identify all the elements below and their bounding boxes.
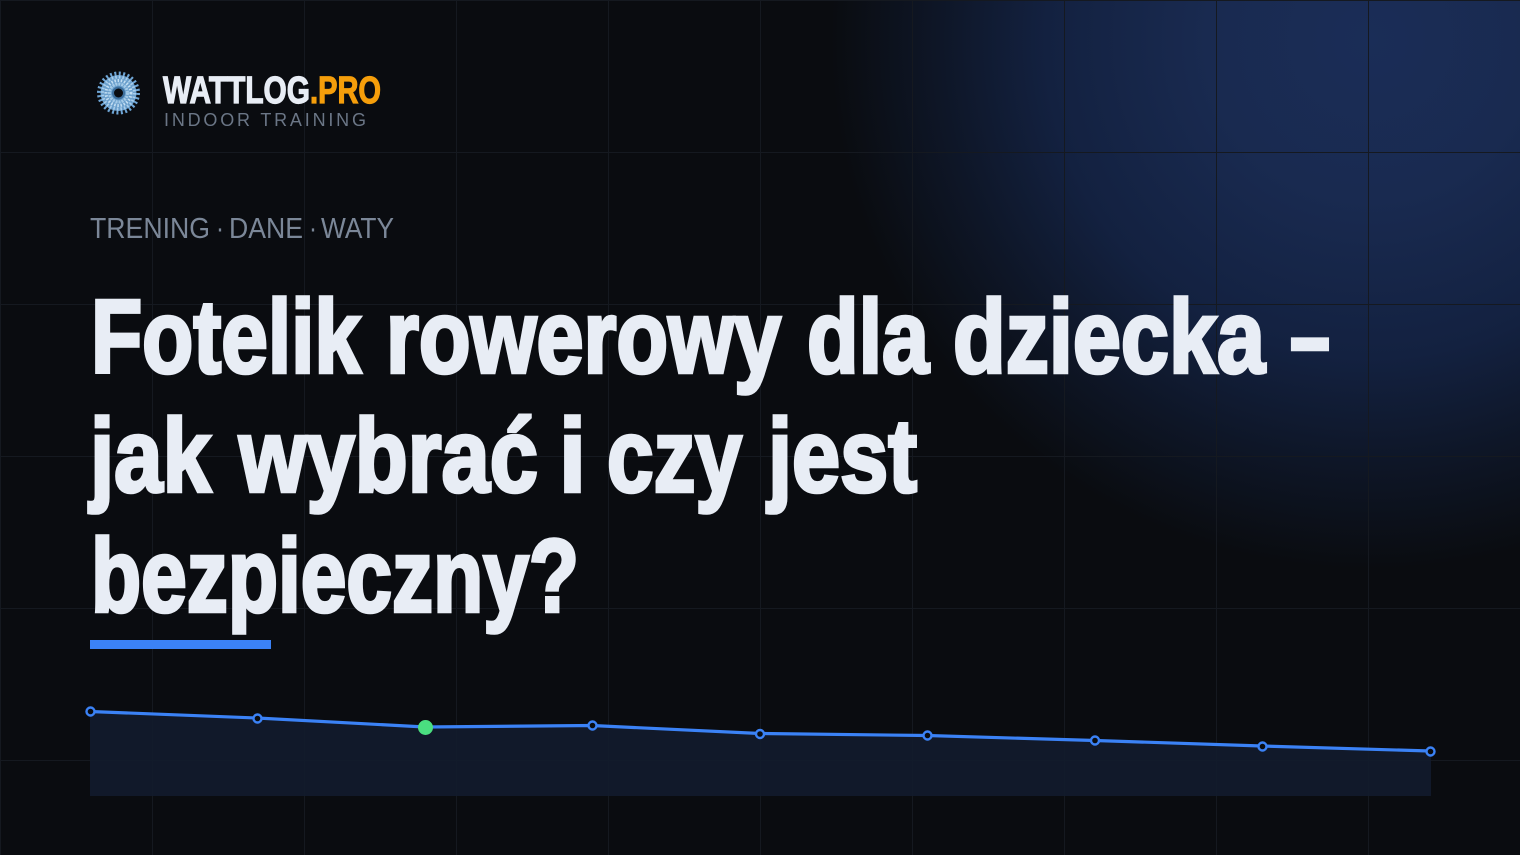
title: jest	[766, 398, 917, 514]
title: dziecka	[953, 280, 1266, 396]
eyebrow text: ·	[216, 213, 224, 245]
eyebrow text: TRENING	[90, 213, 210, 245]
logo wordmark: .PRO	[310, 70, 381, 112]
title: Fotelik	[91, 280, 361, 396]
title: bezpieczny?	[91, 518, 579, 634]
title underline accent	[90, 640, 271, 649]
eyebrow text: ·	[309, 213, 317, 245]
logo wordmark: WATTLOG	[163, 70, 310, 112]
eyebrow text: DANE	[229, 213, 303, 245]
title	[88, 280, 1330, 634]
title: jak	[88, 398, 211, 514]
icon: cassette cog logo	[99, 74, 138, 112]
title: wybrać	[238, 398, 538, 514]
eyebrow text: WATY	[321, 213, 394, 245]
title: i	[559, 398, 586, 514]
eyebrow text	[90, 213, 394, 245]
title: dla	[807, 280, 930, 396]
highlighted data point	[418, 720, 433, 735]
title: –	[1290, 280, 1330, 396]
title: czy	[607, 398, 742, 514]
logo tagline: INDOOR TRAINING	[164, 110, 366, 130]
line chart: power trend	[86, 708, 1434, 796]
title: rowerowy	[386, 280, 781, 396]
